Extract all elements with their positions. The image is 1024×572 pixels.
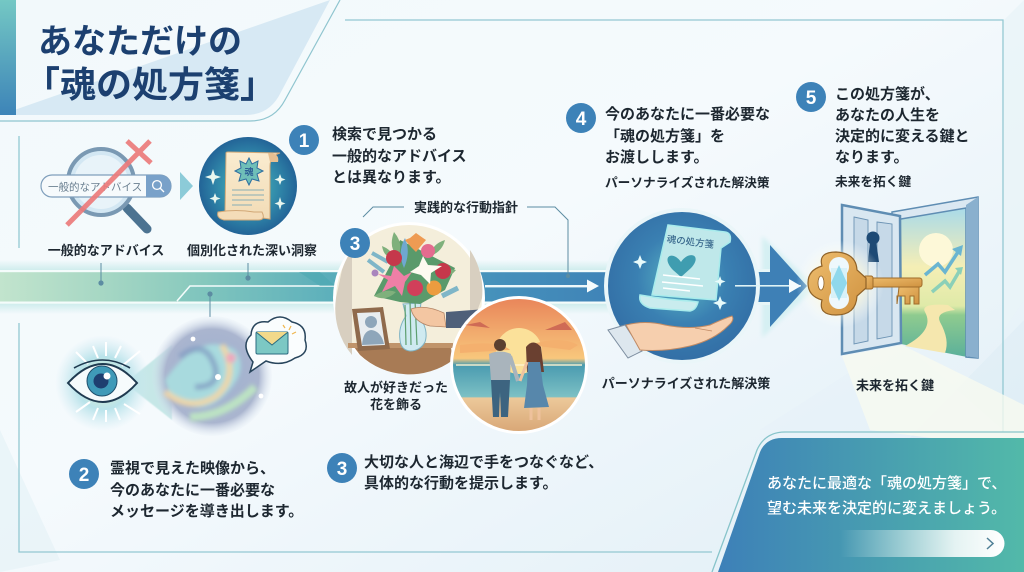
illustration: couple on the beach at sunset — [450, 296, 588, 434]
vase and stems — [400, 303, 426, 351]
title panel — [0, 0, 340, 121]
step 1 — [289, 125, 467, 186]
step 4 text: 「魂の処方箋」を — [605, 127, 725, 145]
icon: personalised scroll: 魂 — [244, 166, 254, 177]
search bar: 一般的なアドバイス — [48, 180, 142, 194]
heading: practical guidelines: 実践的な行動指針 — [414, 200, 518, 215]
step 3 description: 3 — [337, 459, 347, 480]
step 3 description — [327, 453, 603, 492]
step 5 text: この処方箋が、 — [835, 85, 940, 103]
step 1 text — [332, 126, 467, 186]
step 3 text: 具体的な行動を提示します。 — [364, 474, 558, 492]
button pill — [840, 530, 1004, 557]
icon: speech bubble with envelope — [246, 317, 306, 372]
man — [489, 339, 518, 417]
step 2 text: メッセージを導き出します。 — [110, 502, 303, 520]
step 5 text: 未来を拓く鍵 — [835, 174, 911, 189]
illustration: prescription on hand — [604, 208, 760, 364]
badge: step 3: 3 — [350, 234, 360, 255]
step 5 text: 決定的に変える鍵と — [835, 127, 970, 145]
caption: future key: 未来を拓く鍵 — [856, 378, 934, 393]
illustration: flowers for the deceased — [333, 222, 486, 374]
step 2 text: 霊視で見えた映像から、 — [110, 460, 275, 477]
caption: personalised solution: パーソナライズされた解決策 — [602, 376, 770, 391]
step 1 text: 検索で見つかる — [332, 126, 437, 143]
label: generic advice: 一般的なアドバイス — [48, 243, 164, 258]
glowing scroll: 魂の処方箋 — [666, 233, 715, 251]
illustration: open door to future — [796, 197, 1024, 450]
icon: personalised scroll — [199, 137, 297, 235]
step 4 text — [605, 105, 770, 190]
bouquet — [368, 232, 458, 304]
caption: flowers: 花を飾る — [370, 397, 422, 412]
golden key — [796, 240, 922, 328]
caption: flowers — [344, 380, 448, 412]
caption: flowers: 故人が好きだった — [344, 380, 448, 395]
step 5 text: あなたの人生を — [835, 107, 940, 124]
step 2 text: 今のあなたに一番必要な — [110, 481, 275, 499]
step 4 text: お渡しします。 — [605, 148, 709, 166]
connector lines — [98, 207, 570, 317]
step 3 text: 大切な人と海辺で手をつなぐなど、 — [364, 453, 603, 471]
call to action text: 望む未来を決定的に変えましょう。 — [767, 500, 1006, 517]
flow band arrowhead — [735, 236, 816, 338]
step 4 text: 今のあなたに一番必要な — [605, 105, 770, 123]
flow band — [0, 260, 640, 314]
badge: step 3 — [340, 228, 370, 258]
door frame and view — [892, 197, 978, 358]
step 5: 5 — [806, 88, 817, 109]
open hand — [608, 316, 733, 358]
illustration: vision nebula — [152, 316, 272, 436]
title text: あなただけの — [38, 23, 242, 61]
glowing scroll — [633, 225, 730, 311]
label: deep insight: 個別化された深い洞察 — [187, 243, 317, 258]
step 2 — [69, 459, 303, 520]
step 1 text: とは異なります。 — [332, 169, 451, 186]
door leaf — [842, 205, 901, 354]
step 5 text — [835, 85, 970, 189]
step 4 — [566, 103, 770, 190]
call to action text — [767, 474, 1006, 517]
step 1: 1 — [299, 131, 310, 152]
step 1 text: 一般的なアドバイス — [332, 147, 467, 165]
title text — [24, 23, 276, 105]
step 3 text — [364, 453, 603, 492]
call to action text: あなたに最適な「魂の処方箋」で、 — [767, 474, 1006, 492]
step 4: 4 — [576, 109, 587, 130]
step 4 text: パーソナライズされた解決策 — [605, 175, 770, 190]
growth arrows — [925, 245, 963, 292]
icon: search magnifier crossed out — [41, 141, 171, 229]
step 2 text — [110, 460, 303, 520]
title text: 「魂の処方箋」 — [24, 64, 276, 105]
step 5 text: なります。 — [835, 149, 909, 166]
call to action panel — [712, 432, 1024, 572]
step 5 — [796, 82, 970, 189]
white arrow after scroll — [735, 279, 801, 293]
step 2: 2 — [79, 465, 89, 486]
hand holding vase — [411, 307, 486, 328]
arrow: chevron between icons — [180, 172, 193, 200]
icon: eye — [55, 335, 172, 431]
photo frame — [352, 307, 390, 351]
woman — [520, 342, 549, 420]
